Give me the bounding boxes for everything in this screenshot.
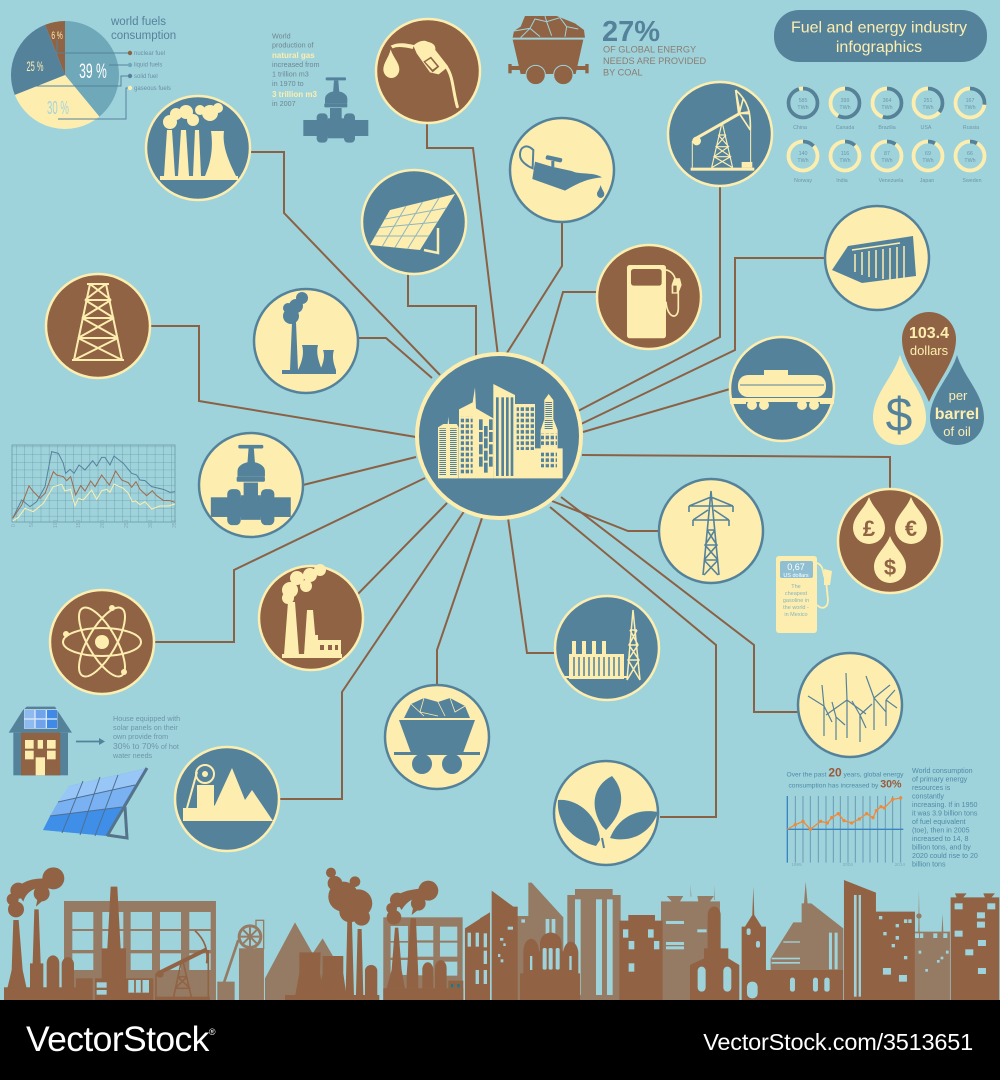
world consumption text: of primary energy [912, 776, 968, 784]
icon: factory with smoke [259, 564, 363, 670]
pie chart: world fuels consumption [11, 16, 176, 129]
skyline: city right [480, 880, 999, 1000]
donut charts: energy by country: 251 [924, 98, 932, 104]
title [774, 10, 987, 62]
donut charts: energy by country: 66 [967, 151, 973, 157]
small gas pump: cheapest gasoline: gasoline in [783, 598, 809, 604]
world consumption text [912, 767, 978, 868]
donut charts: energy by country: Norway [794, 178, 812, 184]
natural gas text: 1 trillion m3 [272, 70, 309, 78]
icon: solar panel in circle [362, 170, 466, 274]
icon: leaves [554, 761, 658, 865]
consumption growth chart: Over the past 20 years, global energy [787, 766, 904, 780]
line chart: left: 250 [124, 519, 130, 528]
price per barrel drops: $ [886, 389, 912, 442]
pie chart: world fuels consumption: 39 % [79, 58, 107, 83]
solar panels text: own provide from [113, 732, 168, 741]
skyline: industrial left [4, 867, 490, 1000]
icon: fuel pump [597, 245, 701, 349]
solar panels text: solar panels on their [113, 723, 178, 732]
icon: cooling towers plant [254, 289, 358, 393]
icon: currency drops: £ [863, 516, 876, 541]
pie chart: world fuels consumption: solid fuel [134, 74, 158, 80]
icon: oil pumpjack [668, 82, 772, 186]
solar panels text: House equipped with [113, 714, 180, 723]
icon: thermal plant [146, 96, 250, 200]
natural gas text: natural gas [272, 51, 315, 60]
coal statistic: OF GLOBAL ENERGY [603, 44, 696, 54]
line chart: left: 350 [172, 519, 178, 528]
line chart: left: 300 [148, 519, 154, 528]
icon: fuel nozzle [376, 19, 480, 123]
consumption growth chart [787, 766, 905, 867]
solar panels text: water needs [112, 751, 153, 760]
small gas pump: cheapest gasoline [776, 556, 832, 633]
icon: large valve [199, 433, 303, 537]
icon: wind turbines [798, 653, 902, 757]
donut charts: energy by country: Canada [836, 125, 854, 131]
donut charts: energy by country: 69 [925, 151, 931, 157]
donut charts: energy by country: TWh [922, 158, 934, 164]
consumption growth chart: 2004 [843, 862, 853, 867]
donut charts: energy by country: TWh [839, 105, 851, 111]
pie chart: world fuels consumption: consumption [111, 30, 176, 42]
world consumption text: it was 3.9 billion tons [912, 810, 978, 818]
world consumption text: (toe), then in 2005 [912, 826, 970, 834]
house with solar panels [9, 707, 72, 775]
icon: coal wagon [385, 685, 489, 789]
coal statistic: NEEDS ARE PROVIDED [603, 56, 706, 66]
pie chart: world fuels consumption: liquid fuels [134, 62, 162, 68]
price per barrel drops: of oil [943, 424, 971, 439]
solar panels text [112, 714, 180, 760]
small gas pump: cheapest gasoline: the world - [783, 605, 809, 611]
world consumption text: of fuel equivalent [912, 818, 966, 826]
donut charts: energy by country: Japan [920, 178, 934, 184]
small gas pump: cheapest gasoline: 0,67 [787, 562, 805, 572]
price per barrel drops: 103.4 [909, 325, 949, 342]
line chart: left: 150 [76, 519, 82, 528]
donut charts: energy by country: Russia [963, 125, 979, 131]
donut charts: energy by country: USA [921, 125, 932, 131]
line chart: left: 200 [100, 519, 106, 528]
small gas pump: cheapest gasoline: US dollars [783, 573, 809, 579]
world consumption text: increasing. If in 1950 [912, 801, 978, 809]
donut charts: energy by country: 167 [966, 98, 974, 104]
donut charts: energy by country: TWh [964, 105, 976, 111]
donut charts: energy by country: TWh [881, 105, 893, 111]
icon: gas valve [303, 77, 368, 143]
world consumption text: World consumption [912, 767, 973, 775]
icon: tank wagon [730, 337, 834, 441]
coal statistic: BY COAL [603, 68, 643, 78]
donut charts: energy by country [788, 88, 984, 184]
icon: currency drops [838, 489, 942, 593]
line chart: left: 100 [53, 519, 59, 528]
icon: power station [555, 596, 659, 700]
icon: oil derrick [46, 274, 150, 378]
world consumption text: constantly [912, 792, 944, 800]
donut charts: energy by country: 87 [884, 151, 890, 157]
icon: atom [50, 590, 154, 694]
line chart: left [11, 445, 178, 528]
natural gas text: World [272, 32, 291, 40]
watermark bar: VectorStock.com/3513651 [703, 1029, 973, 1055]
pie chart: world fuels consumption: 25 % [27, 60, 43, 75]
pie chart: world fuels consumption: nuclear fuel [134, 51, 165, 57]
donut charts: energy by country: 116 [841, 151, 849, 157]
natural gas text: production of [272, 40, 314, 50]
donut charts: energy by country: Venezuela [879, 178, 903, 184]
donut charts: energy by country: TWh [964, 158, 976, 164]
icon: central city [417, 354, 581, 518]
donut charts: energy by country: 585 [799, 98, 807, 104]
line chart: left: 0 [11, 524, 17, 527]
price per barrel drops: barrel [935, 406, 979, 423]
donut charts: energy by country: 140 [799, 151, 807, 157]
pie chart: world fuels consumption: 30 % [47, 99, 69, 119]
price per barrel drops: dollars [910, 343, 949, 358]
title: Fuel and energy industry [791, 20, 967, 36]
solar panels text: 30% to 70% of hot [113, 741, 179, 751]
donut charts: energy by country: 399 [841, 98, 849, 104]
coal statistic [602, 16, 706, 78]
icon: oil can [510, 118, 614, 222]
natural gas text: in 1970 to [272, 79, 304, 88]
watermark bar [0, 1000, 1000, 1080]
natural gas text [272, 32, 320, 108]
large solar panel [43, 768, 147, 838]
watermark bar: ® [209, 1027, 216, 1037]
connector lines [150, 122, 890, 817]
donut charts: energy by country: TWh [797, 158, 809, 164]
consumption growth chart: 2014 [895, 862, 905, 867]
world consumption text: resources is [912, 784, 951, 792]
pie chart: world fuels consumption: gaseous fuels [134, 86, 171, 92]
price per barrel drops [873, 312, 984, 445]
small gas pump: cheapest gasoline: cheapest [785, 591, 808, 597]
world consumption text: billion tons, and by [912, 844, 971, 852]
icon: hydro dam [825, 206, 929, 310]
donut charts: energy by country: China [793, 125, 807, 131]
pie chart: world fuels consumption: world fuels [110, 16, 166, 28]
icon: power pylon [659, 479, 763, 583]
consumption growth chart: 1995 [791, 862, 802, 867]
small gas pump: cheapest gasoline: The [791, 584, 801, 590]
donut charts: energy by country: TWh [922, 105, 934, 111]
icon: mine and mountains [175, 747, 279, 851]
icon: currency drops: $ [884, 555, 896, 580]
small gas pump: cheapest gasoline: in Mexico [784, 612, 808, 618]
price per barrel drops: per [949, 388, 968, 403]
donut charts: energy by country: Sweden [962, 178, 982, 184]
world consumption text: 2020 could rise to 20 [912, 852, 978, 860]
donut charts: energy by country: India [836, 178, 848, 184]
donut charts: energy by country: 364 [883, 98, 891, 104]
title: infographics [836, 39, 922, 56]
donut charts: energy by country: TWh [881, 158, 893, 164]
world consumption text: billion tons [912, 860, 946, 868]
icon: currency drops: € [905, 516, 917, 541]
donut charts: energy by country: TWh [839, 158, 851, 164]
donut charts: energy by country: Brazilia [878, 125, 896, 131]
consumption growth chart: consumption has increased by 30% [788, 779, 902, 791]
watermark bar: VectorStock [26, 1019, 209, 1059]
natural gas text: 3 trillion m3 [272, 90, 317, 99]
world consumption text: increased to 14, 8 [912, 835, 968, 843]
coal statistic: 27% [602, 16, 660, 48]
line chart: left: 50 [29, 521, 35, 527]
arrow [76, 738, 105, 745]
pie chart: world fuels consumption: 6 % [51, 29, 63, 41]
donut charts: energy by country: TWh [797, 105, 809, 111]
icon: coal cart [508, 16, 589, 85]
natural gas text: increased from [272, 60, 320, 69]
natural gas text: in 2007 [272, 99, 296, 108]
